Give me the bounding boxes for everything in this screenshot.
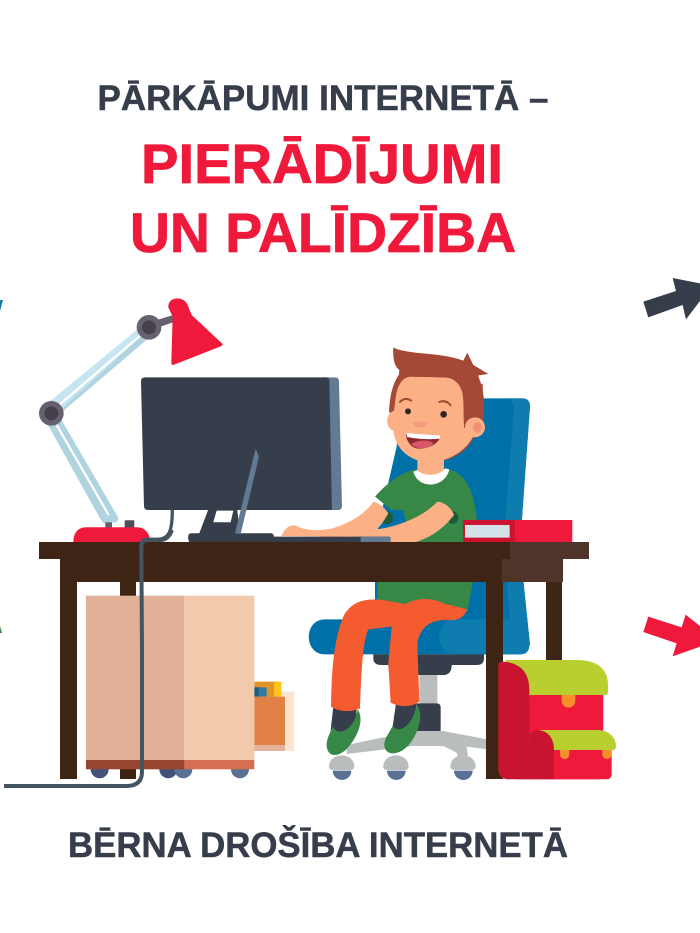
monitor bbox=[141, 377, 342, 545]
drawer box behind cabinet bbox=[4, 530, 294, 786]
eyebrows bbox=[400, 399, 411, 402]
lamp bbox=[39, 298, 223, 543]
collar bbox=[413, 468, 449, 485]
long cable bbox=[4, 530, 172, 786]
footer heading: BĒRNA DROŠĪBA INTERNETĀ bbox=[68, 825, 568, 865]
chair back below desk bbox=[375, 580, 530, 645]
shirt below desk bbox=[377, 580, 473, 612]
lamp shade bbox=[168, 298, 223, 365]
book on desk bbox=[463, 520, 572, 543]
chair seat bbox=[309, 619, 529, 654]
title line: red 2: UN PALĪDZĪBA bbox=[130, 201, 516, 264]
socks bbox=[331, 707, 357, 734]
chair lower bbox=[309, 580, 530, 780]
lamp lower arm bbox=[47, 417, 119, 523]
arrow: dark bbox=[643, 278, 700, 319]
pack side bbox=[498, 662, 530, 779]
chair post bbox=[419, 673, 437, 705]
pants bbox=[331, 599, 467, 711]
pack front flap bbox=[538, 730, 616, 750]
cabinet bbox=[86, 596, 184, 760]
casters bbox=[333, 771, 351, 780]
lamp upper arm bbox=[49, 327, 148, 413]
arms bbox=[320, 502, 388, 542]
mouth bbox=[406, 433, 441, 449]
neck bbox=[417, 450, 444, 477]
arrow tip: green left edge bbox=[0, 626, 2, 633]
pack lid bbox=[505, 660, 608, 695]
chair base bbox=[347, 731, 487, 760]
chair back bbox=[377, 398, 530, 533]
cabinet wheels bbox=[91, 760, 109, 778]
lamp joints bbox=[137, 315, 161, 340]
face bbox=[387, 377, 474, 462]
eyes bbox=[405, 408, 411, 414]
hand left on desk bbox=[282, 523, 350, 537]
hair back bbox=[389, 373, 484, 460]
lamp base bbox=[73, 527, 150, 543]
sleeve shadows bbox=[382, 511, 393, 524]
monitor stand bbox=[188, 505, 274, 543]
boy upper body bbox=[320, 468, 478, 543]
lamp neck bbox=[157, 315, 175, 327]
ear bbox=[465, 417, 485, 437]
hair top bbox=[393, 347, 488, 397]
shirt bbox=[375, 468, 478, 543]
desk legs bbox=[60, 582, 77, 779]
arrow: red bbox=[643, 615, 700, 656]
desk bbox=[39, 542, 589, 779]
nose bbox=[413, 421, 427, 427]
shoes bbox=[327, 709, 361, 755]
backpack bbox=[498, 660, 616, 779]
title line: dark: PĀRKĀPUMI INTERNETĀ – bbox=[98, 79, 548, 118]
arrow tip: blue left edge bbox=[0, 300, 3, 311]
title line: red 1: PIERĀDĪJUMI bbox=[141, 132, 503, 195]
boy head bbox=[387, 347, 488, 485]
monitor cable bbox=[141, 510, 172, 545]
keyboard bbox=[270, 537, 391, 543]
